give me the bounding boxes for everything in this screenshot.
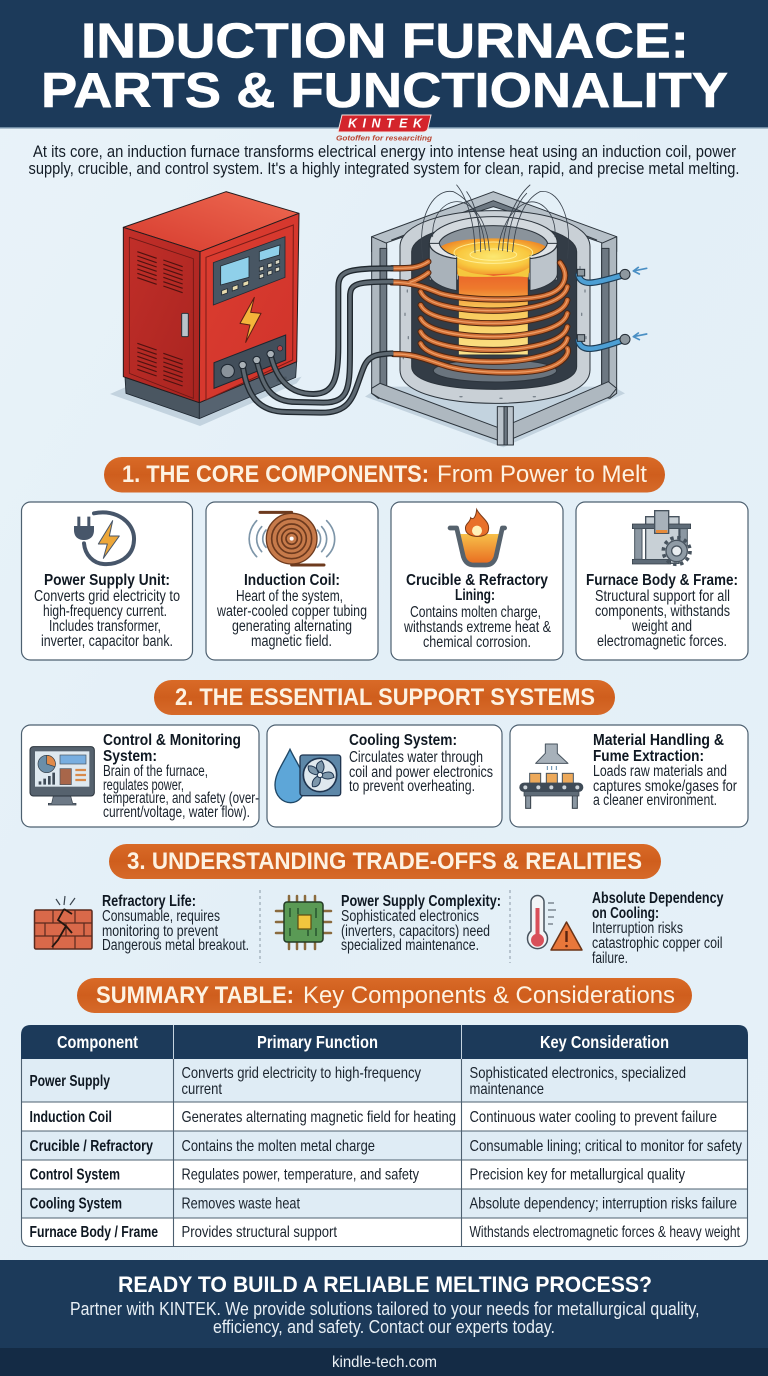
panel: control and monitoring system: Control & Monitoring [103, 732, 241, 749]
panel: power supply unit [22, 502, 192, 660]
panel: material handling and fume extraction [510, 725, 748, 827]
trade-off: power supply complexity: Sophisticated electronics [341, 908, 479, 925]
illustration: power cabinet [110, 192, 302, 426]
logo: KINTEK: KINTEK [348, 116, 423, 130]
row: power supply: Power Supply [30, 1073, 110, 1090]
panel: furnace body and frame: components, withstands [595, 603, 730, 620]
title: INDUCTION FURNACE: [81, 14, 689, 68]
panel: furnace body and frame: weight and [631, 618, 692, 635]
panel: control and monitoring system: Brain of the furnace, [103, 763, 208, 780]
row: cooling system: Cooling System [30, 1196, 122, 1212]
title [41, 14, 728, 118]
panel: induction coil: magnetic field. [251, 633, 332, 650]
panel: induction coil: Heart of the system, [236, 588, 343, 605]
power cables [239, 268, 393, 413]
table header: Component [57, 1032, 138, 1052]
section 1 banner [104, 457, 665, 492]
trade-off: absolute dependency on cooling: catastrophic copper coil [592, 935, 722, 952]
trade-off: power supply complexity [276, 893, 501, 954]
footer website strip: kindle-tech.com [332, 1354, 437, 1371]
frame base [372, 382, 617, 445]
panel: crucible and refractory lining: chemical corrosion. [423, 634, 531, 651]
panel: material handling and fume extraction: a cleaner environment. [593, 792, 717, 809]
panel: control and monitoring system: current/voltage, water flow). [103, 804, 250, 821]
trade-off: absolute dependency on cooling: Absolute Dependency [592, 890, 724, 907]
panel: material handling and fume extraction: Material Handling & [593, 732, 724, 749]
icon: thermometer and warning [528, 896, 582, 950]
row: crucible / refractory [30, 1138, 742, 1155]
panel: power supply unit: Converts grid electricity to [34, 588, 180, 605]
arrows: water inlet [633, 267, 647, 340]
logo: KINTEK: Gotoffen for researciting [336, 134, 432, 142]
trade-off: refractory life: Consumable, requires [102, 908, 220, 925]
icon: circuit chip [276, 896, 331, 949]
trade-off: absolute dependency on cooling: Interruption risks [592, 920, 683, 937]
panel: power supply unit: Power Supply Unit: [44, 572, 170, 589]
row: furnace body / frame: Provides structural support [182, 1224, 337, 1241]
panel: material handling and fume extraction: Loads raw materials and [593, 763, 727, 780]
footer call to action [0, 1260, 768, 1348]
icon: water drop and fan [275, 749, 341, 803]
frame back [372, 192, 617, 445]
icon: monitor dashboard [30, 747, 94, 805]
row: power supply [30, 1065, 686, 1098]
panel: induction coil: generating alternating [232, 618, 352, 635]
panel: cooling system [267, 725, 502, 827]
panel: furnace body and frame: electromagnetic forces. [597, 633, 727, 650]
row: crucible / refractory: Crucible / Refractory [30, 1138, 153, 1155]
panel: material handling and fume extraction: Fume Extraction: [593, 748, 704, 765]
lightning bolt [240, 297, 261, 342]
title: PARTS & FUNCTIONALITY [41, 64, 728, 118]
row: furnace body / frame [30, 1224, 740, 1241]
panel: power supply unit: high-frequency current. [43, 603, 167, 620]
trade-off: absolute dependency on cooling [528, 890, 724, 967]
trade-off: refractory life [34, 893, 249, 954]
panel: cooling system: to prevent overheating. [349, 778, 475, 795]
logo: KINTEK [336, 115, 432, 142]
door handle [182, 313, 188, 337]
table header [21, 1025, 748, 1059]
table rows [21, 1050, 748, 1247]
row: control system [30, 1166, 685, 1184]
outer shell [400, 211, 590, 403]
panel: control and monitoring system: regulates power, [103, 777, 184, 794]
panel: crucible and refractory lining: withstands extreme heat & [403, 619, 552, 636]
row: induction coil [30, 1109, 717, 1126]
panel: cooling system: coil and power electronics [349, 764, 493, 781]
vents [137, 252, 183, 386]
section 1 banner: 1. THE CORE COMPONENTS: [122, 461, 429, 488]
trade-off: refractory life: Refractory Life: [102, 893, 196, 910]
row: crucible / refractory: Contains the molten metal charge [182, 1138, 375, 1155]
row: power supply: Sophisticated electronics, specialized [470, 1065, 686, 1082]
footer website strip [0, 1348, 768, 1376]
cabinet base [125, 362, 297, 419]
panel: furnace body and frame: Structural support for all [595, 588, 730, 605]
panel: furnace body and frame: Furnace Body & Frame: [586, 572, 738, 589]
cabinet body [123, 192, 299, 403]
panel: material handling and fume extraction: captures smoke/gases for [593, 778, 737, 795]
panel: cooling system: Circulates water through [349, 749, 483, 766]
row: power supply: maintenance [470, 1081, 544, 1098]
row: cooling system: Removes waste heat [182, 1196, 300, 1212]
panel: crucible and refractory lining [391, 502, 563, 660]
trade-off: power supply complexity: specialized maintenance. [341, 937, 479, 954]
trade-off: refractory life: Dangerous metal breakout. [102, 937, 249, 954]
connector panel [214, 335, 286, 388]
water pipes [578, 275, 623, 349]
trade-off: power supply complexity: Power Supply Complexity: [341, 893, 501, 910]
row: control system: Control System [30, 1166, 120, 1184]
panel: induction coil [206, 502, 378, 660]
magnetic field lines [422, 185, 569, 258]
panel: crucible and refractory lining: Lining: [455, 587, 495, 604]
footer call to action: Partner with KINTEK. We provide solutions tailored to your needs for metallurgical quality, [70, 1299, 700, 1319]
icon: copper spiral [249, 512, 335, 565]
row: furnace body / frame: Furnace Body / Frame [30, 1224, 158, 1241]
row: cooling system [30, 1196, 737, 1212]
panel: control and monitoring system: temperature, and safety (over- [103, 790, 259, 807]
ground shadow [365, 387, 625, 447]
icon: crucible with flame [450, 509, 505, 565]
panel: control and monitoring system [22, 725, 259, 827]
summary table [21, 1025, 748, 1247]
trade-off: refractory life: monitoring to prevent [102, 923, 219, 940]
section 1 banner: From Power to Melt [437, 461, 647, 488]
row: power supply: Converts grid electricity to high-frequency [182, 1065, 421, 1082]
section 3 banner: 3. UNDERSTANDING TRADE-OFFS & REALITIES [127, 848, 642, 875]
section 2 banner: 2. THE ESSENTIAL SUPPORT SYSTEMS [175, 684, 595, 711]
table header: Key Consideration [540, 1032, 669, 1052]
summary banner: Key Components & Considerations [303, 982, 675, 1009]
trade-off: power supply complexity: (inverters, capacitors) need [341, 923, 490, 940]
panel: crucible and refractory lining: Contains molten charge, [410, 604, 541, 621]
copper coil [392, 262, 568, 372]
row: induction coil: Induction Coil [30, 1109, 112, 1126]
panel: crucible and refractory lining: Crucible & Refractory [406, 572, 548, 589]
icon: cracked brick wall [34, 896, 92, 949]
icon: plug and bolt [74, 512, 134, 564]
row: control system: Precision key for metallurgical quality [470, 1166, 685, 1184]
panel: furnace body and frame [576, 502, 748, 660]
header band [0, 0, 768, 128]
summary banner: SUMMARY TABLE: [96, 982, 294, 1009]
panel: cooling system: Cooling System: [349, 732, 457, 749]
trade-off: absolute dependency on cooling: failure. [592, 950, 628, 967]
row: induction coil: Generates alternating magnetic field for heating [182, 1109, 456, 1126]
row: induction coil: Continuous water cooling to prevent failure [470, 1109, 717, 1126]
intro text [28, 142, 740, 178]
crucible [429, 217, 557, 355]
row: control system: Regulates power, temperature, and safety [182, 1166, 419, 1184]
icon: conveyor with hood [519, 744, 583, 808]
illustration: induction furnace [365, 185, 647, 447]
panel: induction coil: Induction Coil: [244, 572, 340, 589]
panel: power supply unit: inverter, capacitor bank. [41, 633, 173, 650]
panel: power supply unit: Includes transformer, [49, 618, 161, 635]
panel: induction coil: water-cooled copper tubing [216, 603, 367, 620]
footer call to action: efficiency, and safety. Contact our experts today. [213, 1317, 555, 1337]
trade-off: absolute dependency on cooling: on Cooling: [592, 905, 659, 922]
row: power supply: current [182, 1081, 222, 1098]
summary banner [77, 978, 692, 1013]
control panel [213, 237, 285, 305]
icon: frame and gear [632, 511, 691, 564]
table header: Primary Function [257, 1032, 378, 1052]
panel: control and monitoring system: System: [103, 748, 157, 765]
footer call to action: READY TO BUILD A RELIABLE MELTING PROCESS? [118, 1272, 652, 1297]
